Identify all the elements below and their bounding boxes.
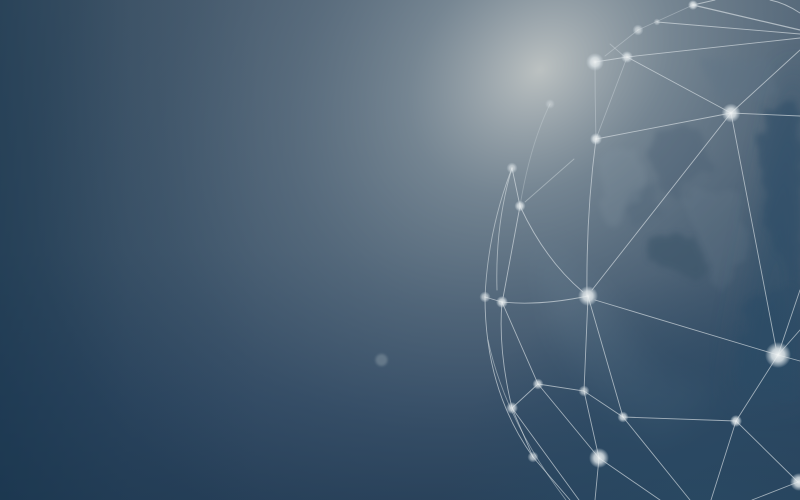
network wireframe lines — [485, 0, 800, 500]
globe continents texture — [535, 60, 800, 440]
lower right shading — [430, 270, 800, 500]
left edge vignette — [0, 0, 260, 500]
network nodes — [480, 0, 800, 491]
lens flare spot — [376, 354, 388, 366]
